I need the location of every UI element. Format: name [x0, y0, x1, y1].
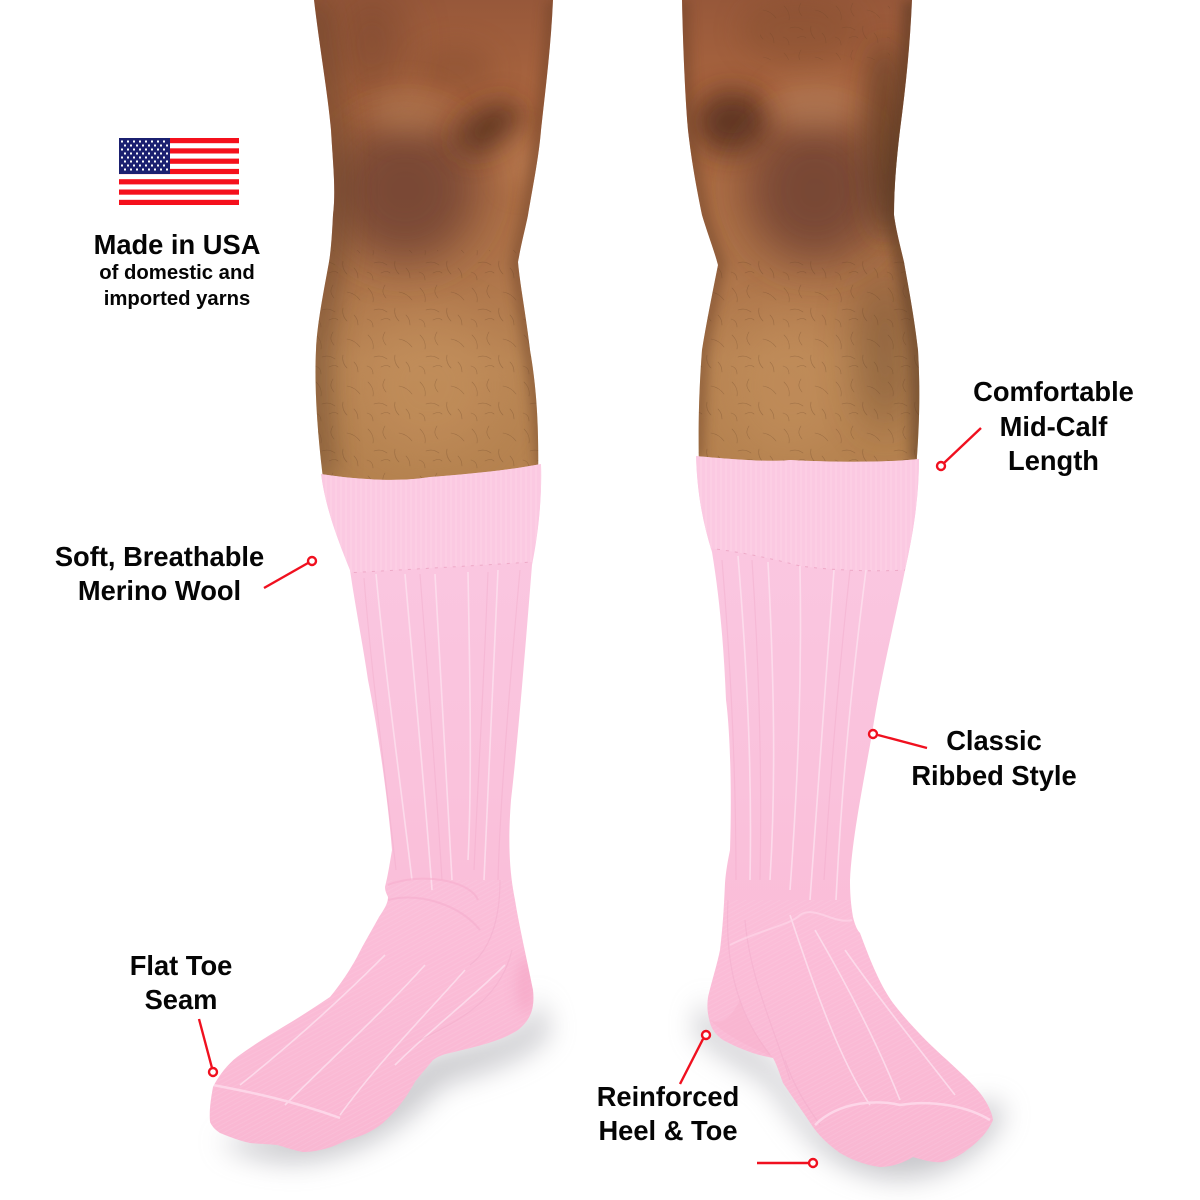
arrow: ribbed style — [869, 730, 927, 748]
label: ribbed style: Ribbed Style — [911, 760, 1077, 791]
arrow: merino wool — [264, 557, 316, 588]
heading: Made in USA: Made in USA — [94, 229, 260, 260]
label: reinforced heel and toe: Reinforced — [597, 1081, 739, 1112]
shadow: right foot — [695, 1000, 1005, 1178]
leg edge shadow — [314, 0, 334, 480]
arrow: heel — [680, 1031, 710, 1084]
leg hair — [316, 250, 538, 480]
label: mid-calf length — [973, 376, 1134, 476]
heading: Made in USA: imported yarns — [104, 288, 250, 310]
knee shading — [332, 0, 532, 282]
left leg — [314, 0, 553, 480]
leg hair — [698, 261, 920, 462]
icon: American flag — [119, 138, 239, 205]
left sock ribs — [240, 570, 505, 1115]
right sock ribs — [738, 556, 955, 1105]
left ankle folds — [388, 879, 480, 930]
label: mid-calf length: Mid-Calf — [1000, 411, 1108, 442]
arrow: flat toe seam — [199, 1019, 217, 1076]
label: mid-calf length: Comfortable — [973, 376, 1134, 407]
heading: Made in USA: of domestic and — [99, 262, 255, 284]
right sock cuff — [696, 456, 919, 571]
label: merino wool: Merino Wool — [78, 575, 241, 606]
arrow: mid-calf length — [937, 428, 981, 470]
label: merino wool — [55, 541, 264, 606]
label: ribbed style — [911, 725, 1077, 791]
shadow: left foot — [220, 995, 550, 1161]
left sock cuff — [321, 464, 541, 573]
leg edge shadow — [682, 0, 718, 460]
left sock rib shadows — [364, 570, 520, 1040]
right sock — [690, 450, 1010, 1175]
right ankle fold — [730, 912, 852, 945]
right heel — [710, 1000, 773, 1058]
right toe seam — [815, 1102, 990, 1125]
label: flat toe seam: Seam — [145, 984, 217, 1015]
label: merino wool: Soft, Breathable — [55, 541, 264, 572]
right sock rib shadows — [722, 560, 850, 1125]
label: reinforced heel and toe — [597, 1081, 739, 1146]
arrow: toe — [757, 1159, 817, 1167]
heading: Made in USA — [94, 229, 260, 310]
label: mid-calf length: Length — [1008, 445, 1099, 476]
right leg — [682, 0, 920, 462]
knee shading — [694, 0, 909, 455]
label: flat toe seam: Flat Toe — [130, 950, 232, 981]
left sock — [200, 460, 550, 1160]
label: ribbed style: Classic — [946, 725, 1042, 756]
label: reinforced heel and toe: Heel & Toe — [598, 1115, 738, 1146]
label: flat toe seam — [130, 950, 232, 1015]
left toe seam — [213, 1085, 340, 1118]
